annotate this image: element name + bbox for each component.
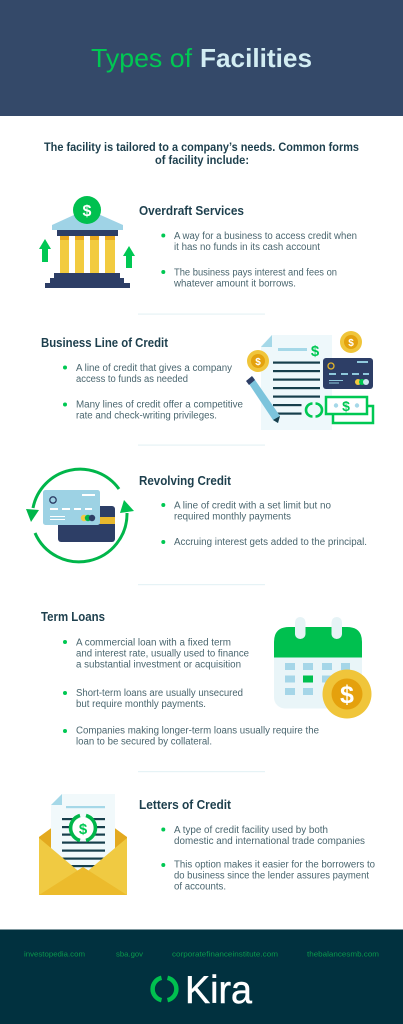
bullets: term loans: Short-term loans are usually unsecured xyxy=(76,688,243,699)
bullets: letters of credit: This option makes it easier for the borrowers to xyxy=(174,860,375,870)
bullets: business line of credit: A line of credit that gives a company xyxy=(76,363,232,374)
footer band xyxy=(0,930,403,1024)
bullets: term loans: loan to be secured by collateral. xyxy=(76,736,212,748)
sources: investopedia.com xyxy=(24,950,85,958)
bullets: business line of credit xyxy=(63,363,243,422)
bullets: business line of credit: Many lines of credit offer a competitive xyxy=(76,400,243,410)
icon: document, cards and cash xyxy=(246,331,373,430)
icon: document, cards and cash: $ xyxy=(311,343,320,360)
header band xyxy=(0,0,403,116)
bullets: term loans xyxy=(63,638,319,748)
bullets: term loans: and interest rate, usually used to finance xyxy=(76,648,249,660)
heading: term loans: Term Loans xyxy=(41,610,105,624)
sources: corporatefinanceinstitute.com xyxy=(172,950,278,958)
title xyxy=(91,43,312,73)
logo: Kira xyxy=(153,969,252,1012)
bullets: revolving credit: required monthly payments xyxy=(174,512,291,522)
logo: Kira: Kira xyxy=(185,969,252,1012)
bullets: term loans: Companies making longer-term loans usually require the xyxy=(76,726,319,736)
intro text: The facility is tailored to a company’s needs. Common forms xyxy=(44,140,359,154)
bullets: revolving credit xyxy=(161,500,367,548)
intro text xyxy=(44,140,359,167)
bullets: revolving credit: Accruing interest gets added to the principal. xyxy=(174,537,367,548)
heading: letters of credit: Letters of Credit xyxy=(139,798,232,812)
heading: overdraft: Overdraft Services xyxy=(139,204,244,218)
bullets: revolving credit: A line of credit with a set limit but no xyxy=(174,500,331,512)
bullets: term loans: but require monthly payments. xyxy=(76,699,206,710)
bullets: letters of credit xyxy=(161,825,375,892)
bullets: term loans: A commercial loan with a fixed term xyxy=(76,638,231,648)
bullets: letters of credit: do business since the lender assures payment xyxy=(174,870,369,882)
icon: document, cards and cash: $ xyxy=(342,398,350,414)
sources xyxy=(24,950,379,958)
icon: document, cards and cash: $ xyxy=(255,357,261,368)
sources: sba.gov xyxy=(116,950,143,958)
heading: revolving credit: Revolving Credit xyxy=(139,474,232,488)
heading: business line of credit: Business Line of Credit xyxy=(41,336,169,350)
bullets: letters of credit: of accounts. xyxy=(174,882,226,892)
icon: calendar with coin xyxy=(274,617,372,718)
icon: bank xyxy=(39,196,135,288)
bullets: letters of credit: domestic and international trade companies xyxy=(174,836,365,847)
intro text: of facility include: xyxy=(155,153,249,167)
bullets: overdraft: it has no funds in its cash account xyxy=(174,242,320,253)
title: Types of xyxy=(91,43,193,73)
bullets: overdraft: A way for a business to access credit when xyxy=(174,231,357,242)
title: Facilities xyxy=(200,43,312,73)
bullets: business line of credit: access to funds as needed xyxy=(76,374,188,385)
icon: envelope with letter xyxy=(39,794,127,895)
icon: envelope with letter: $ xyxy=(79,821,88,838)
icon: revolving cards xyxy=(26,469,134,562)
bullets: letters of credit: A type of credit facility used by both xyxy=(174,825,328,836)
bullets: overdraft xyxy=(161,231,357,290)
bullets: term loans: a substantial investment or acquisition xyxy=(76,660,241,670)
sources: thebalancesmb.com xyxy=(307,950,379,958)
bullets: overdraft: whatever amount it borrows. xyxy=(173,278,296,290)
icon: document, cards and cash: $ xyxy=(348,338,354,349)
icon: calendar with coin: $ xyxy=(340,681,354,709)
icon: bank: $ xyxy=(83,203,92,220)
bullets: overdraft: The business pays interest and fees on xyxy=(174,268,337,278)
bullets: business line of credit: rate and check-writing privileges. xyxy=(76,410,217,422)
